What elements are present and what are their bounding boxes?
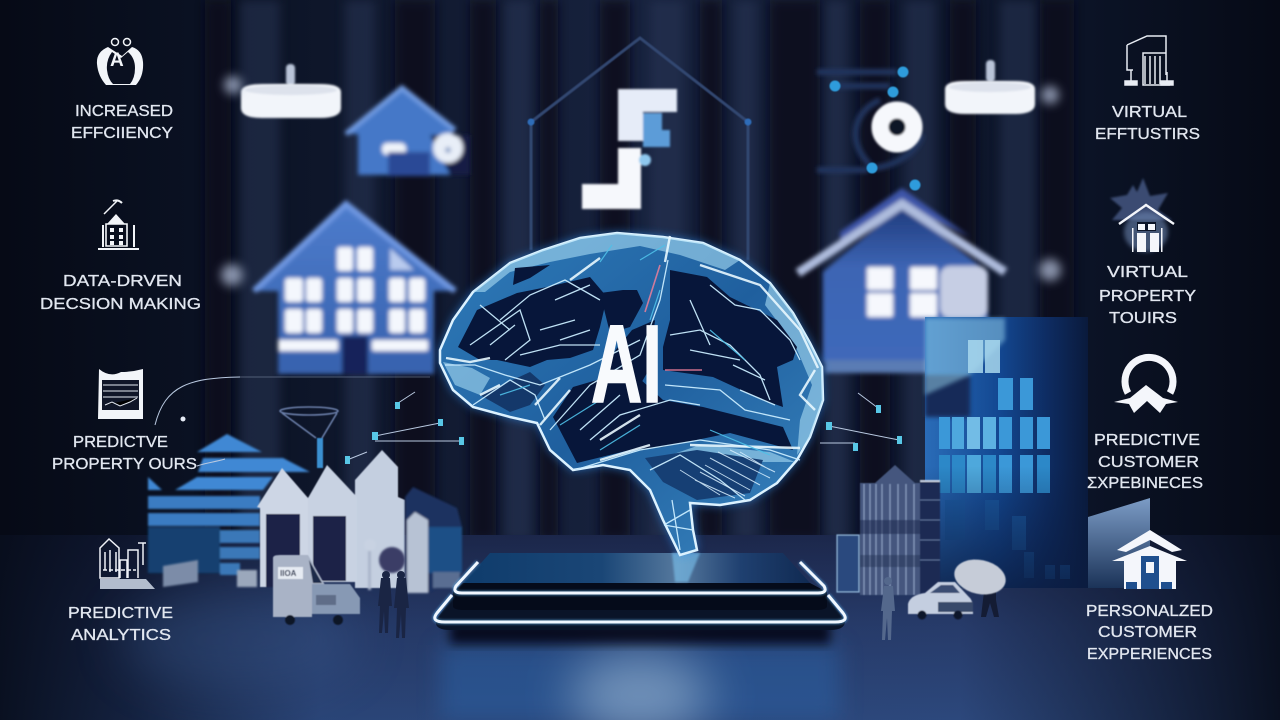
item: virtual efficiency (1095, 36, 1200, 143)
label: CUSTOMER (1098, 454, 1199, 471)
icon: city analytics (100, 539, 155, 589)
item: predictive analytics (68, 539, 173, 644)
large house left (254, 204, 455, 374)
label: PROPERTY OURS (52, 456, 197, 473)
white miniature houses (257, 450, 405, 588)
label: EFFCIIENCY (71, 125, 173, 142)
delivery truck (273, 555, 360, 625)
hanging lamp left (241, 64, 341, 118)
blue striped building left (148, 434, 310, 575)
small crates (163, 560, 257, 587)
floor (0, 535, 1280, 720)
brain dark cells (458, 265, 797, 500)
item: data-driven decision making (40, 200, 201, 313)
brain with AI label (440, 233, 823, 555)
label: VIRTUAL (1112, 104, 1187, 121)
small buildings right of platform (837, 465, 940, 595)
platform (435, 553, 845, 644)
item: increased efficiency (71, 38, 173, 142)
label: VIRTUAL (1107, 264, 1188, 281)
icon: white house with blue door (1112, 530, 1187, 589)
delivery truck: IIOA (280, 569, 297, 578)
miniature car (908, 582, 973, 620)
funnel device under house (280, 407, 338, 468)
icon: document chart (98, 369, 143, 419)
label: ANALYTICS (71, 627, 171, 644)
icon: arch with arrows (1114, 357, 1178, 413)
icon: piggy figure with A: A (110, 50, 124, 71)
item: predictive property tours (52, 369, 197, 473)
label: PREDICTIVE (68, 605, 173, 622)
brain pale plates (443, 233, 823, 462)
large house right (798, 188, 1005, 373)
tree and shrub (364, 539, 405, 590)
label (52, 434, 197, 473)
label: CUSTOMER (1098, 624, 1197, 641)
glass tower right (925, 317, 1088, 588)
brain circuit lines (445, 260, 800, 550)
label: EXPPERIENCES (1087, 646, 1212, 663)
label: PERSONALZED (1086, 603, 1213, 620)
miniature person right (881, 577, 895, 640)
small house top left (346, 88, 470, 176)
item: virtual property tours (1099, 178, 1196, 327)
label: ΣXPEBINECES (1087, 475, 1203, 492)
label (1095, 104, 1200, 143)
abstract white glyph blocks (582, 89, 677, 209)
hanging lamp right (945, 60, 1035, 114)
label (1087, 432, 1203, 492)
label: PREDICTIVE (1094, 432, 1200, 449)
label: TOUIRS (1109, 310, 1177, 327)
label: DECSION MAKING (40, 296, 201, 313)
label (40, 273, 201, 313)
icon: house with star burst (1110, 178, 1174, 252)
thin connector lines and dots (155, 377, 902, 466)
item: predictive customer experiences (1087, 357, 1203, 492)
icon: columned outline building (1125, 36, 1173, 85)
label: PREDICTVE (73, 434, 168, 451)
label (68, 605, 173, 644)
label (1086, 603, 1213, 663)
label: PROPERTY (1099, 288, 1196, 305)
dome figure (951, 555, 1009, 617)
label: AI: AI (591, 303, 662, 426)
miniature people left (378, 571, 409, 638)
icon: building with hammer (98, 200, 139, 250)
ring sensor with circuit lines (817, 66, 922, 190)
label (1099, 264, 1196, 327)
dark building left of platform (405, 487, 462, 593)
label: EFFTUSTIRS (1095, 126, 1200, 143)
label: DATA-DRVEN (63, 273, 182, 290)
outline house centre (528, 38, 752, 260)
label: INCREASED (75, 103, 173, 120)
glowing wall spots (221, 76, 1061, 286)
item: personalized customer experiences (1086, 530, 1213, 663)
label (71, 103, 173, 142)
translucent panel right (1088, 498, 1150, 588)
